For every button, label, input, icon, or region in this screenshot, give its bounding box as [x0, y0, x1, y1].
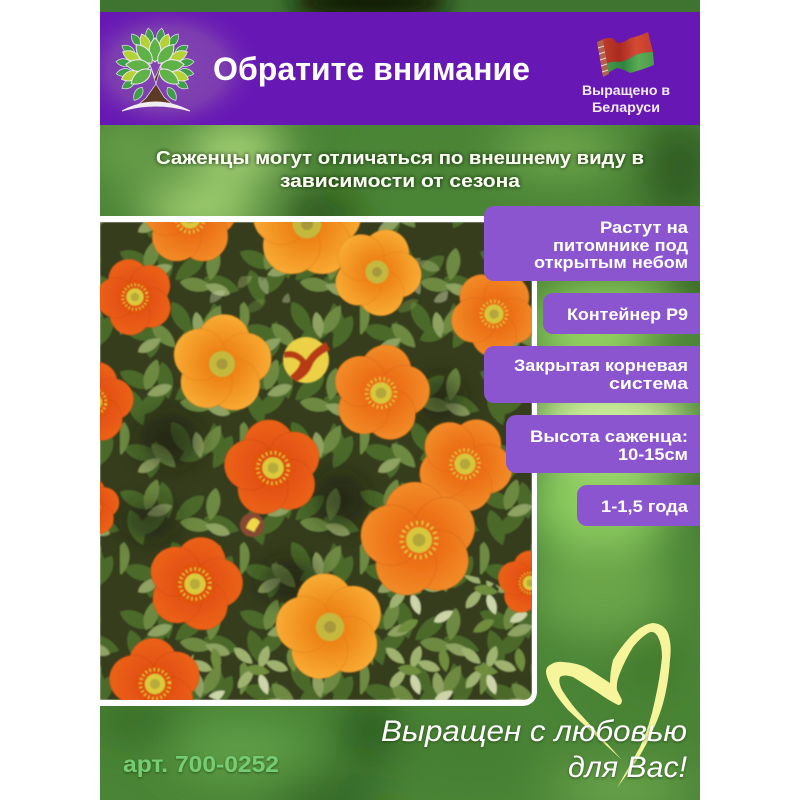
flower: lower left: [150, 536, 244, 632]
icon: tree logo: [115, 28, 195, 111]
background: green bokeh: [100, 125, 700, 800]
top dark strip: [100, 0, 700, 12]
flower: centre: [334, 344, 431, 441]
flower: bottom left: [108, 637, 200, 700]
photo: orange cinquefoil flowers: [100, 222, 532, 700]
subtitle: зависимости от сезона: [280, 170, 521, 191]
spec tag: height: 10-15см: [618, 446, 688, 464]
flowers: [100, 222, 532, 700]
icon: flag of Belarus: [597, 32, 654, 77]
bud: small: [240, 513, 264, 537]
spec tag: closed root system: Закрытая корневая: [514, 357, 688, 375]
spec tag: grown outdoors: Растут на: [600, 219, 689, 237]
flower: mid right: [418, 418, 513, 512]
title: Обратите внимание: [213, 51, 530, 87]
photo frame: [100, 216, 537, 706]
subtitle: Саженцы могут отличаться по внешнему виду в: [156, 147, 644, 168]
icon: yellow heart: [546, 623, 671, 788]
spec tag: grown outdoors: открытым небом: [534, 254, 688, 272]
slogan: Выращен с любовью: [381, 715, 687, 748]
flower: top centre: [252, 222, 362, 276]
shadow patches: [124, 378, 462, 600]
spec tag: grown outdoors: [484, 206, 700, 281]
slogan: для Вас!: [568, 751, 688, 784]
flower: right edge: [450, 273, 532, 356]
spec tag: container: Контейнер Р9: [567, 306, 688, 324]
spec tag: age: 1-1,5 года: [601, 498, 689, 516]
spec tag: age: [577, 485, 700, 526]
spec tag: closed root system: [484, 346, 700, 403]
flower: large lower centre: [360, 480, 476, 596]
spec tag: height: [506, 415, 700, 473]
flower: lower left of centre: [223, 418, 320, 516]
foliage: [100, 222, 534, 706]
bud: yellow and red: [283, 337, 330, 383]
flower: left edge lower: [100, 480, 120, 535]
flower: upper centre: [334, 228, 422, 317]
spec tag: height: Высота саженца:: [530, 428, 688, 446]
logo glow: [100, 12, 260, 125]
label: grown in Belarus: [582, 83, 670, 115]
flower: right edge lower: [497, 550, 532, 614]
flower: red upper left: [100, 258, 172, 336]
spec tag: closed root system: система: [609, 375, 689, 393]
flower: left edge: [100, 361, 134, 442]
spec tag: grown outdoors: питомнике под: [553, 237, 689, 255]
article number: арт. 700-0252: [123, 751, 279, 777]
subtitle: [156, 147, 644, 191]
label: grown in Belarus: Выращено в: [582, 83, 670, 98]
flower: large orange left: [169, 310, 275, 413]
header band: [100, 12, 700, 125]
flower: lower centre: [274, 572, 382, 680]
spec tag: container: [543, 293, 700, 334]
flower: top left: [144, 222, 236, 262]
label: grown in Belarus: Беларуси: [592, 100, 660, 115]
slogan: [381, 715, 688, 784]
